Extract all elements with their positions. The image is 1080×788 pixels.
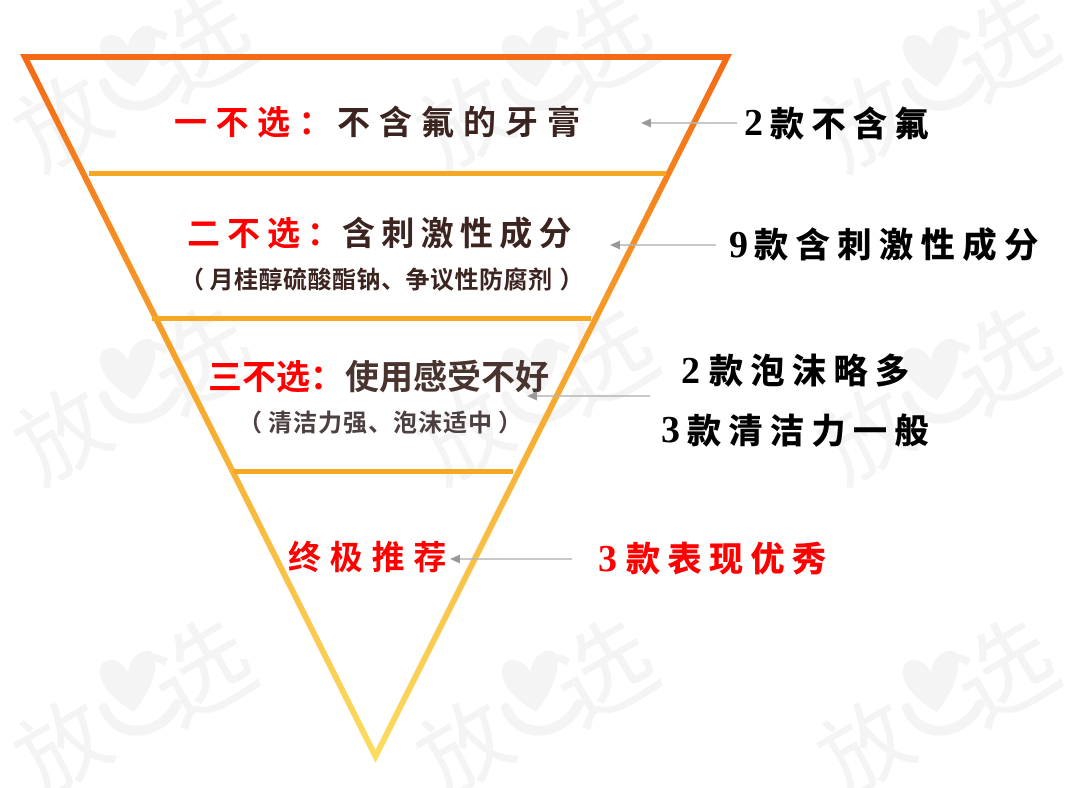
tier 1 heading: 一不选： [174, 104, 340, 141]
divider: tier three and four [233, 469, 513, 474]
watermark: bottom row left: 选 [131, 600, 274, 747]
watermark: middle row left: 放 [0, 372, 128, 503]
result: three recommended: 款表现优秀 [626, 541, 834, 579]
tier 1 heading [174, 104, 589, 141]
tier 3 heading [208, 359, 549, 397]
watermark: bottom row centre [402, 600, 676, 788]
tier 3 heading: 三不选： [208, 359, 344, 397]
arrow: tier 4 [450, 554, 572, 564]
tier 4 heading: 终极推荐 [288, 539, 455, 576]
watermark: top row right: 放 [803, 59, 931, 190]
result: too much foam: 款泡沫略多 [709, 353, 916, 391]
watermark: middle row centre: 放 [402, 372, 530, 503]
divider: tier two and three [152, 316, 591, 321]
tier 2 heading [187, 215, 578, 252]
result: average cleaning: 款清洁力一般 [687, 413, 936, 451]
tier 2 heading: 含刺激性成分 [342, 215, 578, 252]
watermark: bottom row right [803, 600, 1077, 788]
watermark: middle row centre: 选 [533, 288, 676, 435]
tier 2 note: （月桂醇硫酸酯钠、争议性防腐剂 ） [180, 267, 584, 294]
divider: tier one and two [89, 171, 666, 176]
arrow: tier 1 [641, 118, 737, 128]
watermark: middle row left: 选 [131, 288, 274, 435]
watermark: middle row right: 放 [803, 372, 931, 503]
watermark: top row centre [402, 0, 676, 190]
result: irritating ingredients: 款含刺激性成分 [754, 227, 1046, 265]
watermark: middle row right: 选 [934, 288, 1077, 435]
watermark: bottom row right: 选 [934, 600, 1077, 747]
watermark: middle row left [0, 288, 274, 503]
watermark: middle row centre [402, 288, 676, 503]
tier 3 note: （清洁力强、泡沫适中） [238, 410, 523, 437]
watermark: top row centre: 放 [402, 59, 530, 190]
tier 3 heading: 使用感受不好 [345, 359, 549, 397]
watermark: top row left [0, 0, 274, 190]
arrow: tier 3 [527, 392, 650, 400]
tier 1 heading: 不含氟的牙膏 [337, 104, 589, 141]
result: average cleaning: 3 [661, 409, 680, 451]
tier 2 heading: 二不选： [187, 215, 347, 252]
funnel triangle outline [25, 57, 727, 756]
result: irritating ingredients: 9 [729, 224, 748, 266]
result: too much foam: 2 [681, 350, 700, 392]
watermark: bottom row centre: 选 [533, 600, 676, 747]
watermark: top row left: 放 [0, 59, 128, 190]
result: three recommended: 3 [598, 538, 617, 580]
watermark: bottom row left [0, 600, 274, 788]
arrow: tier 2 [610, 240, 716, 250]
result: no fluoride: 款不含氟 [770, 106, 936, 144]
watermark: middle row right [803, 288, 1077, 503]
result: no fluoride: 2 [744, 102, 763, 144]
watermark: top row right [803, 0, 1077, 190]
